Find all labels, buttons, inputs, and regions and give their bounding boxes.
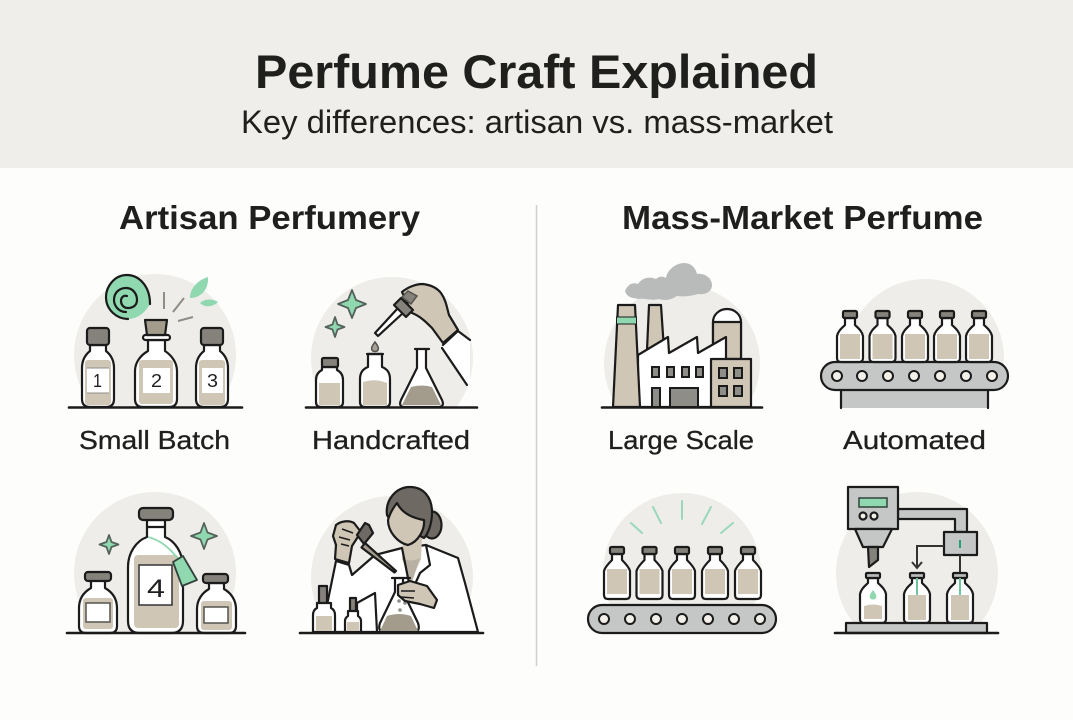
heading: mass-market perfume: Mass-Market Perfume	[622, 199, 983, 236]
icon: factory	[600, 263, 764, 409]
label: handcrafted: Handcrafted	[312, 425, 470, 455]
number 1: 1	[93, 371, 102, 391]
subtitle: Key differences: artisan vs. mass-market	[241, 104, 833, 140]
number 4: 4	[147, 575, 165, 603]
header band	[0, 0, 1073, 168]
icon: handcrafted dropper	[304, 277, 478, 409]
icon: conveyor with rays	[588, 493, 776, 651]
heading: artisan perfumery: Artisan Perfumery	[119, 199, 421, 236]
icon: automated filling machine	[835, 487, 998, 654]
number 2: 2	[151, 371, 162, 391]
label: small batch: Small Batch	[79, 425, 230, 455]
number 3: 3	[207, 371, 218, 391]
icon: perfumer in lab coat	[298, 486, 484, 634]
icon: small batch bottles	[68, 274, 244, 409]
icon: artisan bottle with tag	[66, 492, 246, 634]
icon: automated conveyor	[820, 279, 1010, 410]
title: Perfume Craft Explained	[255, 45, 818, 98]
label: large scale: Large Scale	[608, 425, 754, 455]
label: automated: Automated	[843, 425, 986, 455]
